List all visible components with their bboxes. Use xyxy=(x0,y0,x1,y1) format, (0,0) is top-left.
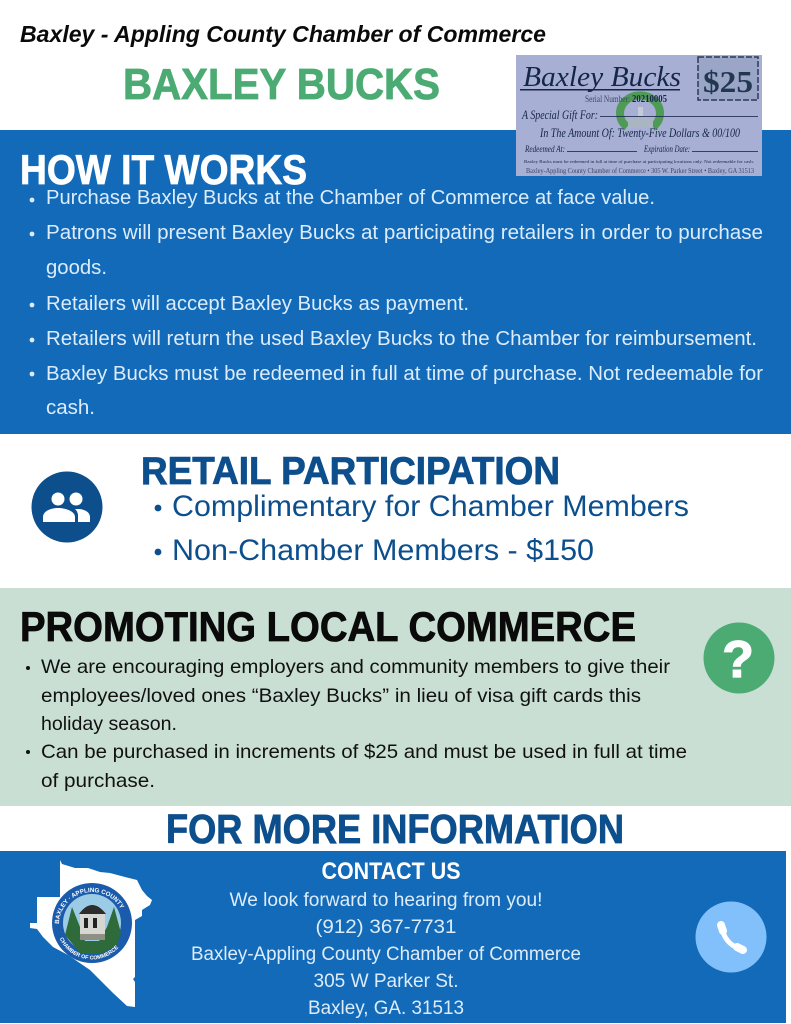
image: Baxley Bucks gift certificate xyxy=(516,55,762,176)
how it works bullet list: cash. xyxy=(46,397,95,419)
seal text xyxy=(54,888,124,960)
panel: contact us xyxy=(0,851,786,1023)
retail participation bullet list: Non-Chamber Members - $150 xyxy=(172,534,594,567)
how it works bullet list xyxy=(30,187,763,419)
promoting local commerce bullet list: employees/loved ones “Baxley Bucks” in lieu of visa gift cards this xyxy=(41,685,641,707)
contact details: We look forward to hearing from you! xyxy=(230,890,542,911)
how it works bullet list: Purchase Baxley Bucks at the Chamber of Commerce at face value. xyxy=(46,187,655,209)
logo: county map with chamber seal xyxy=(30,860,152,1007)
organization title: Baxley - Appling County Chamber of Commerce xyxy=(20,21,546,47)
certificate value box: $25 xyxy=(703,64,753,99)
how it works bullet list: Retailers will accept Baxley Bucks as payment. xyxy=(46,293,469,315)
contact details: Baxley, GA. 31513 xyxy=(308,998,464,1019)
how it works bullet list: goods. xyxy=(46,257,107,279)
how it works bullet list: Retailers will return the used Baxley Bucks to the Chamber for reimbursement. xyxy=(46,328,757,350)
promoting local commerce bullet list: Can be purchased in increments of $25 and must be used in full at time xyxy=(41,741,687,763)
how it works bullet list: Baxley Bucks must be redeemed in full at time of purchase. Not redeemable for xyxy=(46,363,763,385)
contact details: (912) 367-7731 xyxy=(316,917,456,938)
how it works bullet list: Patrons will present Baxley Bucks at participating retailers in order to purchase xyxy=(46,222,763,244)
contact details: 305 W Parker St. xyxy=(314,971,458,992)
main title: Baxley Bucks: BAXLEY BUCKS xyxy=(123,60,440,109)
certificate fields: Redeemed At: xyxy=(524,144,565,154)
certificate fields: Serial Number: xyxy=(585,95,630,105)
icon: question mark in circle xyxy=(704,622,774,694)
contact details: Baxley-Appling County Chamber of Commerce xyxy=(191,944,581,965)
panel: promoting local commerce xyxy=(0,588,791,806)
certificate fields: 20210005 xyxy=(632,94,667,105)
promoting local commerce bullet list xyxy=(26,656,687,792)
icon: phone in circle xyxy=(696,902,766,972)
certificate fields: A Special Gift For: xyxy=(521,107,598,122)
promoting local commerce bullet list: of purchase. xyxy=(41,770,155,792)
certificate seal xyxy=(620,95,660,128)
retail participation bullet list: Complimentary for Chamber Members xyxy=(172,490,689,523)
certificate heading: Baxley Bucks xyxy=(523,62,681,93)
heading: retail participation: RETAIL PARTICIPATION xyxy=(141,450,560,493)
contact details xyxy=(191,890,581,1019)
heading: promoting local commerce: PROMOTING LOCAL COMMERCE xyxy=(20,603,636,650)
certificate fields: Baxley-Appling County Chamber of Commerce • 305 W. Parker Street • Baxley, GA 31513 xyxy=(526,167,754,175)
heading: for more information: FOR MORE INFORMATION xyxy=(166,806,624,852)
promoting local commerce bullet list: We are encouraging employers and community members to give their xyxy=(41,656,671,678)
certificate fields: Expiration Date: xyxy=(643,144,690,154)
certificate fields xyxy=(521,94,758,175)
seal text: CHAMBER OF COMMERCE xyxy=(60,938,118,960)
promoting local commerce bullet list: holiday season. xyxy=(41,713,177,735)
seal text: BAXLEY · APPLING COUNTY xyxy=(54,888,124,924)
retail participation bullet list xyxy=(155,490,689,567)
certificate fields: Baxley Bucks must be redeemed in full at time of purchase at participating locations only. Not redeemable for cash. xyxy=(524,159,754,164)
icon: people in circle xyxy=(32,472,102,542)
certificate value box xyxy=(698,57,758,100)
icon: question mark in circle: ? xyxy=(722,631,754,689)
heading: how it works: HOW IT WORKS xyxy=(20,146,307,193)
panel: how it works xyxy=(0,130,791,434)
heading: contact us: CONTACT US xyxy=(322,858,460,885)
